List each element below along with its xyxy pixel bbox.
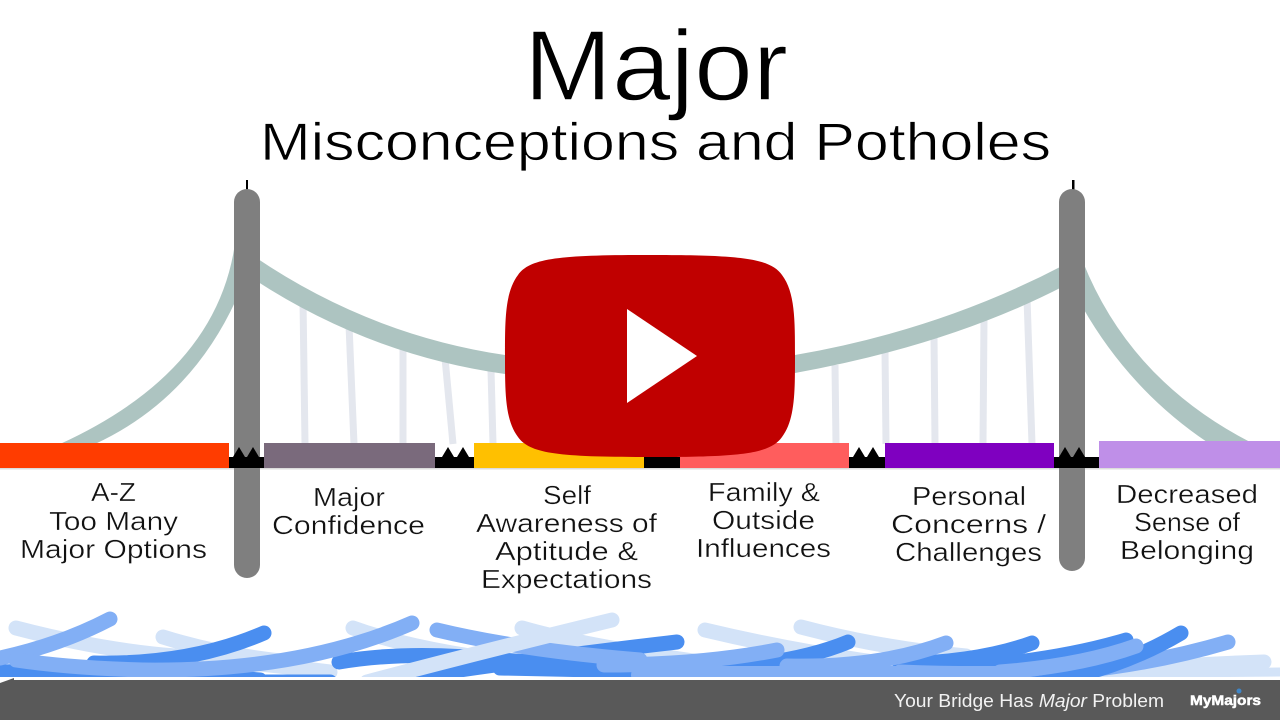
label: too many options: Major Options: [20, 534, 207, 564]
label: decreased belonging: [1116, 479, 1258, 565]
label: too many options: A-Z: [91, 477, 136, 507]
MyMajors logo: MyMajors: [1190, 692, 1261, 708]
label: family and outside influences: Family &: [708, 477, 820, 507]
left tower: [234, 180, 260, 578]
label: family and outside influences: [696, 477, 831, 563]
label: decreased belonging: Belonging: [1120, 535, 1254, 565]
label: personal concerns: [891, 481, 1047, 567]
bridge hangers: [303, 298, 1032, 444]
label: personal concerns: Personal: [912, 481, 1026, 511]
label: personal concerns: Challenges: [895, 537, 1042, 567]
label: decreased belonging: Sense of: [1134, 507, 1241, 537]
right tower: [1059, 180, 1085, 571]
label: personal concerns: Concerns /: [891, 509, 1047, 539]
label: self awareness: Aptitude &: [495, 536, 638, 566]
label: self awareness: Expectations: [481, 564, 652, 594]
title: Major: [524, 10, 788, 122]
label: self awareness: Awareness of: [476, 508, 658, 538]
suspension cables: [60, 235, 1250, 444]
title: Misconceptions and Potholes: [260, 113, 1051, 172]
label: major confidence: [272, 482, 425, 540]
title: [260, 10, 1051, 172]
label: self awareness: Self: [543, 480, 592, 510]
label: too many options: [20, 477, 207, 564]
label: family and outside influences: Outside: [712, 505, 815, 535]
label: self awareness: [476, 480, 658, 594]
water waves: [0, 619, 1280, 686]
label: major confidence: Major: [313, 482, 385, 512]
label: major confidence: Confidence: [272, 510, 425, 540]
label: family and outside influences: Influences: [696, 533, 831, 563]
road deck with potholes: [0, 441, 1280, 468]
footer bar: [0, 677, 1280, 720]
road shadow: [0, 468, 1280, 470]
play button: [505, 255, 795, 457]
footer tagline: Your Bridge Has Major Problem: [894, 690, 1164, 711]
label: too many options: Too Many: [49, 506, 178, 536]
label: decreased belonging: Decreased: [1116, 479, 1258, 509]
